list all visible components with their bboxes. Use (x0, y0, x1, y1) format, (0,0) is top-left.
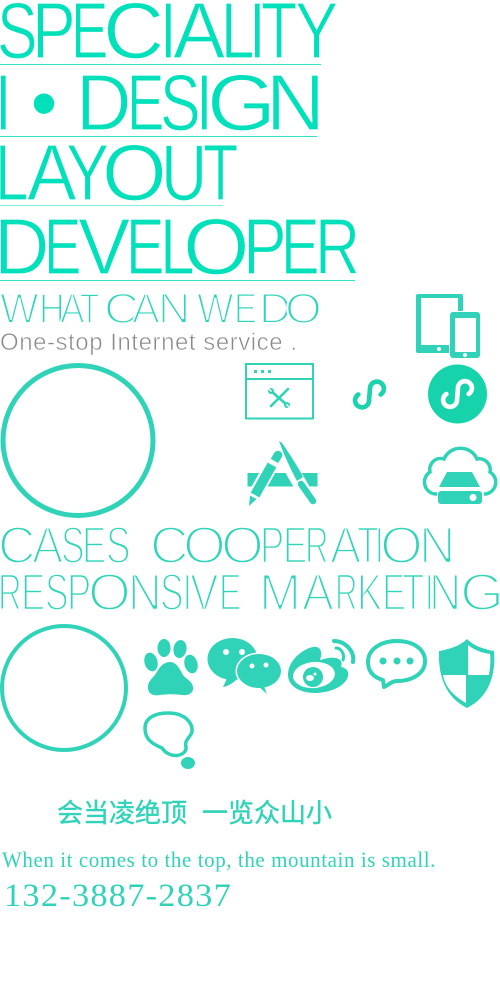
heading: CASES COOPERATION: C (150, 517, 189, 575)
subheading: WHAT CAN WE DO: W (197, 285, 234, 333)
phone number: 132-3887-2837 (4, 878, 232, 914)
heading: RESPONSIVE MARKETING: O (88, 564, 131, 622)
title line: LAYOUT: T (203, 128, 238, 217)
heading: RESPONSIVE MARKETING: V (190, 564, 218, 622)
title line: I • DESIGN: G (207, 58, 276, 147)
heading: RESPONSIVE MARKETING: T (402, 564, 425, 622)
title line: DEVELOPER: E (281, 202, 319, 291)
icon: paw (142, 639, 200, 695)
title line: DEVELOPER: E (126, 202, 164, 291)
icon: app store pencil and brush (248, 441, 318, 506)
chinese slogan second part: 一览众山小 (202, 798, 332, 828)
heading: RESPONSIVE MARKETING: N (429, 564, 461, 622)
heading: CASES COOPERATION: T (357, 517, 379, 575)
heading: CASES COOPERATION: S (106, 517, 131, 575)
heading: CASES COOPERATION: O (380, 517, 423, 575)
heading: CASES COOPERATION: E (283, 517, 307, 575)
heading: RESPONSIVE MARKETING: A (302, 564, 334, 622)
subheading: WHAT CAN WE DO: H (39, 285, 65, 333)
icon: shield (439, 639, 494, 708)
heading: RESPONSIVE MARKETING: S (45, 564, 69, 622)
subheading: WHAT CAN WE DO: A (60, 285, 85, 333)
icon: mini program circle (428, 364, 487, 424)
title line: I • DESIGN: S (160, 58, 201, 147)
title line: DEVELOPER: V (78, 202, 130, 291)
title line: DEVELOPER: E (44, 202, 81, 291)
heading: CASES COOPERATION: O (183, 517, 226, 575)
decorative circle: small (2, 626, 126, 750)
title line: DEVELOPER: O (183, 202, 250, 291)
heading: CASES COOPERATION: O (221, 517, 264, 575)
title line: I • DESIGN: I (196, 58, 213, 147)
subheading: WHAT CAN WE DO: A (132, 285, 160, 333)
icon: weibo (288, 641, 353, 693)
subheading: WHAT CAN WE DO: O (285, 285, 322, 333)
heading: CASES COOPERATION: S (61, 517, 85, 575)
title line: DEVELOPER (0, 202, 360, 291)
heading: RESPONSIVE MARKETING: I (425, 564, 434, 622)
heading: CASES COOPERATION: A (32, 517, 63, 575)
icon: mini program link (355, 382, 384, 407)
heading: CASES COOPERATION: R (305, 517, 329, 575)
title line: LAYOUT (0, 128, 238, 217)
title line: SPECIALITY (0, 0, 338, 75)
title line: DEVELOPER: P (243, 202, 287, 291)
heading: CASES COOPERATION: P (260, 517, 284, 575)
title line: I • DESIGN: E (127, 58, 164, 147)
heading: RESPONSIVE MARKETING: S (160, 564, 184, 622)
heading: CASES COOPERATION: I (375, 517, 384, 575)
icon: wechat (208, 638, 282, 694)
heading: RESPONSIVE MARKETING (0, 564, 500, 622)
title line: DEVELOPER: L (160, 202, 195, 291)
heading: RESPONSIVE MARKETING: E (219, 564, 242, 622)
heading: RESPONSIVE MARKETING: M (259, 564, 301, 622)
icon: chat bubble (368, 641, 425, 687)
subheading: WHAT CAN WE DO: T (80, 285, 99, 333)
heading: RESPONSIVE MARKETING: E (382, 564, 406, 622)
title line: DEVELOPER: R (315, 202, 360, 291)
icon: browser window with tools (246, 364, 313, 418)
heading: RESPONSIVE MARKETING: P (67, 564, 91, 622)
icon: cloud storage drive (424, 448, 496, 504)
chinese slogan: 会当凌绝顶 (57, 798, 187, 828)
subheading: WHAT CAN WE DO: D (259, 285, 291, 333)
heading: RESPONSIVE MARKETING: K (357, 564, 382, 622)
subheading: WHAT CAN WE DO: W (0, 285, 39, 333)
title line: LAYOUT: A (27, 128, 77, 217)
heading: CASES COOPERATION: A (330, 517, 361, 575)
subheading: WHAT CAN WE DO: C (104, 285, 139, 333)
title line: LAYOUT: O (102, 128, 167, 217)
heading: RESPONSIVE MARKETING: R (335, 564, 358, 622)
heading: CASES COOPERATION: N (419, 517, 455, 575)
icon: thought bubble (145, 713, 195, 769)
title line: I • DESIGN: D (76, 58, 131, 147)
title line: I • DESIGN (0, 58, 325, 147)
title line: I • DESIGN: • (30, 58, 58, 147)
title line: LAYOUT: U (161, 128, 207, 217)
subheading: WHAT CAN WE DO: N (158, 285, 190, 333)
decorative circle: large (3, 366, 153, 516)
tagline: One-stop Internet service . (0, 329, 297, 356)
subheading: WHAT CAN WE DO (0, 285, 322, 333)
subheading: WHAT CAN WE DO: E (234, 285, 257, 333)
heading: RESPONSIVE MARKETING: I (183, 564, 192, 622)
heading: CASES COOPERATION (0, 517, 455, 575)
title line: I • DESIGN: N (266, 58, 325, 147)
title line: LAYOUT: Y (66, 128, 109, 217)
english slogan: When it comes to the top, the mountain is small. (2, 847, 436, 872)
heading: CASES COOPERATION: E (82, 517, 106, 575)
icon: tablet and phone (416, 294, 482, 360)
heading: RESPONSIVE MARKETING: E (21, 564, 45, 622)
heading: RESPONSIVE MARKETING: N (128, 564, 162, 622)
